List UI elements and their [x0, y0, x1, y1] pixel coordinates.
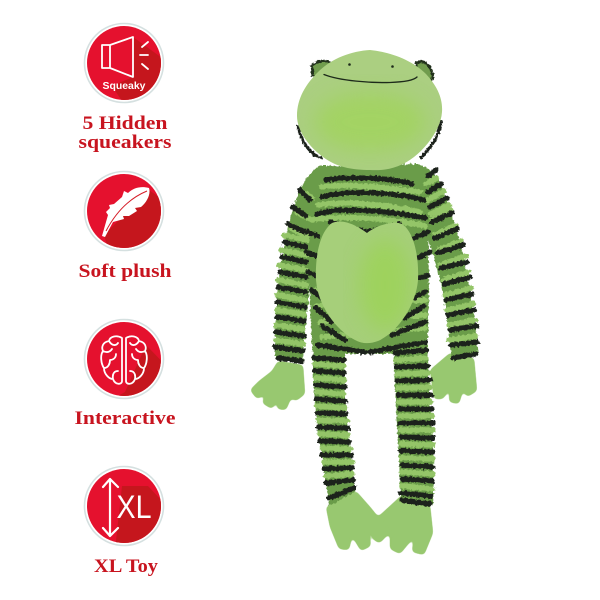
icon: soft plush feather badge	[84, 172, 170, 255]
heading: 5 Hidden squeakers: squeakers	[78, 132, 172, 153]
icon: interactive brain badge	[84, 318, 164, 400]
heading: 5 Hidden squeakers: 5 Hidden	[82, 113, 168, 134]
striped fur body and limbs	[275, 164, 478, 506]
heading: XL Toy: XL Toy	[94, 556, 159, 577]
frog hands and feet	[250, 353, 477, 555]
icon: squeaky speaker badge	[84, 22, 164, 104]
icon: XL size badge	[84, 466, 164, 546]
heading: Soft plush: Soft plush	[78, 261, 172, 282]
frog belly	[316, 222, 418, 344]
icon: squeaky speaker badge: Squeaky	[102, 80, 146, 92]
frog ears	[298, 61, 441, 158]
frog face: eyes and mouth	[324, 63, 417, 83]
illustration: plush frog toy	[250, 45, 478, 555]
heading: 5 Hidden squeakers	[78, 113, 172, 153]
icon: XL size badge: XL	[116, 489, 152, 525]
frog head	[297, 50, 442, 170]
heading: Interactive: Interactive	[74, 408, 176, 429]
